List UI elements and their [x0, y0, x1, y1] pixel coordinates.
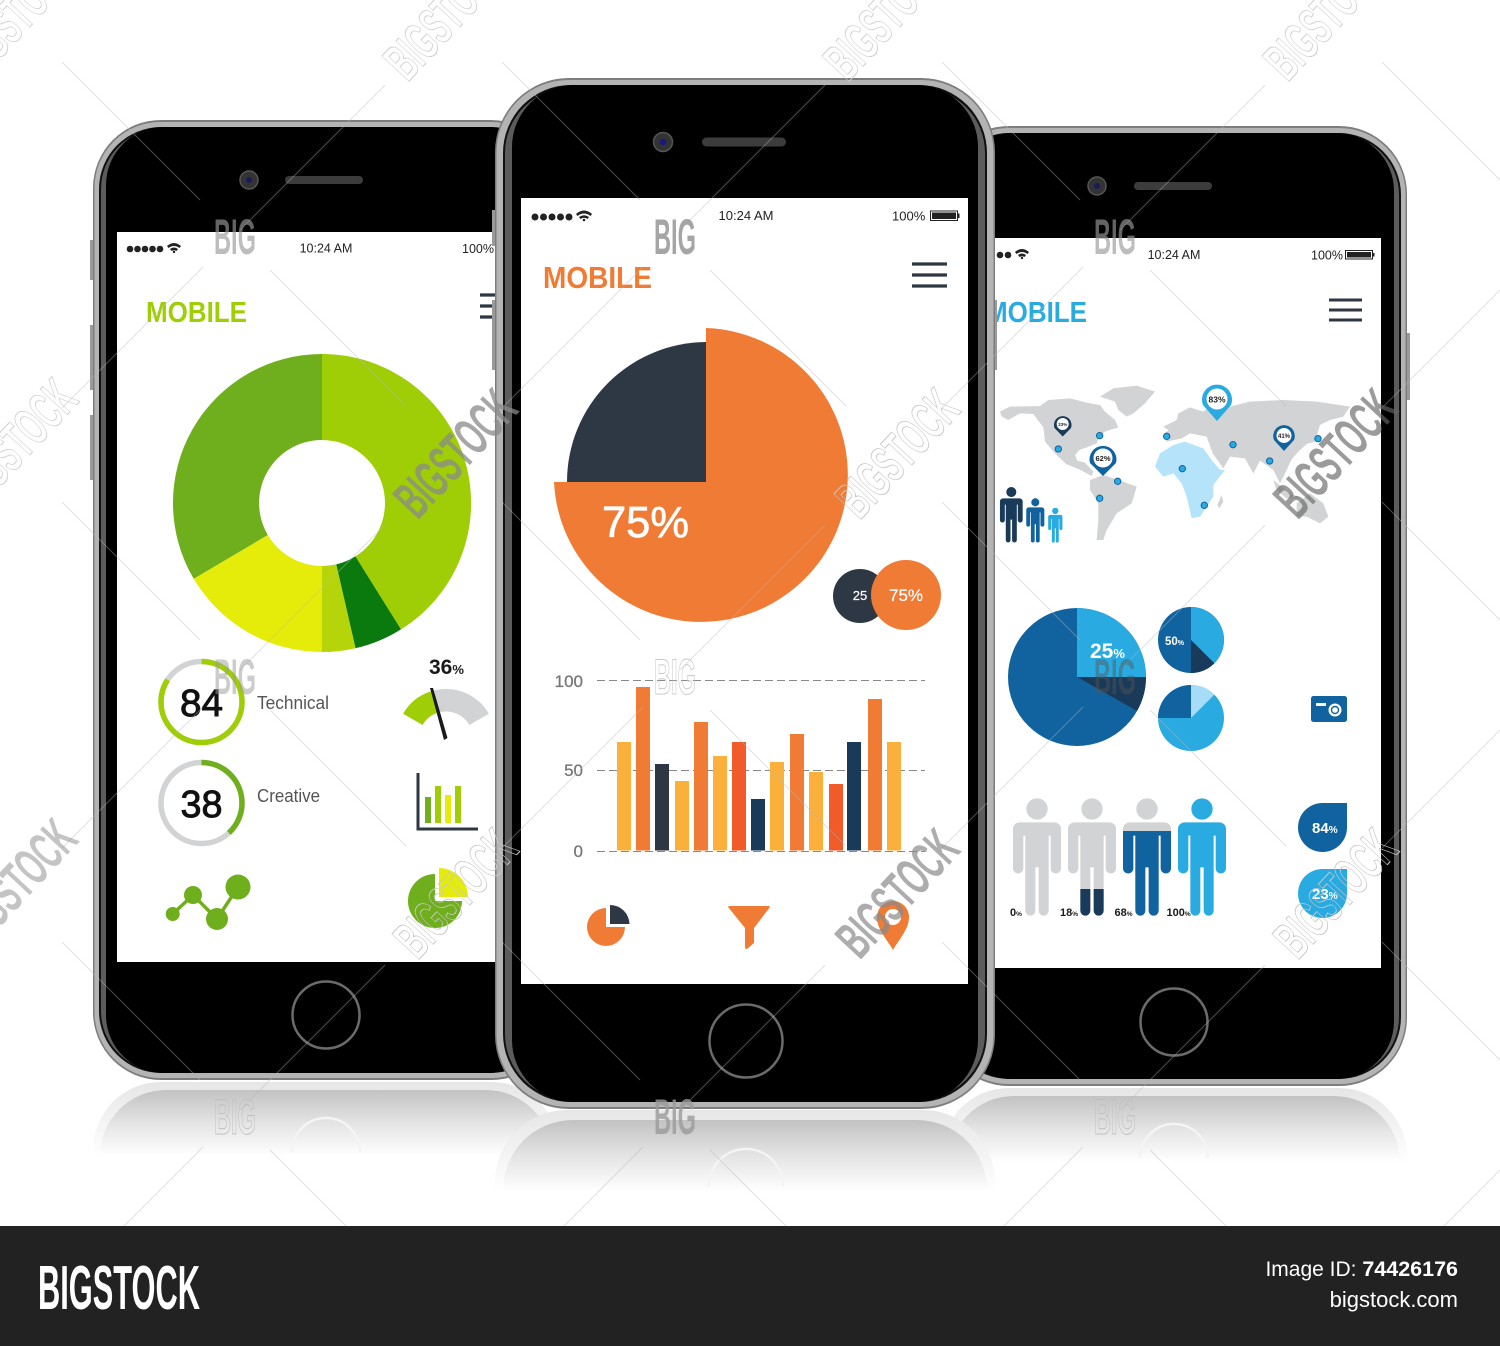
map pin 23 percent — [1054, 416, 1072, 436]
watermark: BIG labels: BIG — [214, 209, 256, 265]
watermark: BIGSTOCK diagonals: BIGSTOCK — [1263, 818, 1409, 969]
percentage labels: 0% — [1010, 907, 1022, 919]
bar chart — [555, 672, 925, 861]
camera — [654, 132, 672, 152]
drop: 23 percent: 23% — [1312, 886, 1338, 903]
ring: creative 38: Creative — [257, 786, 320, 806]
madagascar — [1217, 495, 1223, 508]
watermark: BIG labels: BIG — [654, 649, 696, 705]
heading: MOBILE — [543, 260, 652, 295]
map pin 62 percent — [1090, 446, 1116, 476]
ring: creative 38 — [161, 762, 320, 844]
pie: 50 percent — [1158, 607, 1224, 673]
screen — [965, 238, 1381, 968]
icon: bar chart — [418, 773, 478, 829]
status bar — [997, 248, 1374, 262]
percentage labels: 100% — [1166, 907, 1191, 919]
pie: 25 percent large: 25% — [1090, 640, 1125, 663]
comparison bubbles: 25 — [853, 588, 867, 603]
pie chart 75 percent — [554, 328, 848, 622]
small people: family — [1000, 487, 1062, 543]
phone: right, blue world map dashboard — [941, 126, 1410, 1086]
north america — [1000, 398, 1118, 476]
status bar — [532, 208, 960, 224]
text: BIG — [1094, 1089, 1136, 1145]
bars — [617, 687, 901, 850]
ring: creative 38: 38 — [180, 784, 222, 826]
reflection: right phone — [941, 1088, 1407, 1162]
map pin 23 percent: 23% — [1058, 422, 1067, 427]
status bar: 100% — [462, 242, 494, 256]
image id: Image ID: 74426176 — [1265, 1257, 1458, 1281]
home button — [1140, 988, 1208, 1056]
icon: pie — [408, 868, 468, 928]
footer bar: BIGSTOCK — [38, 1254, 200, 1323]
watermark: BIG labels — [214, 209, 1136, 1145]
person 100 percent — [1178, 798, 1226, 916]
status bar — [127, 242, 494, 256]
status bar: 100% — [892, 208, 926, 224]
watermark: BIGSTOCK diagonals: BIGSTOCK — [1263, 378, 1409, 529]
speaker — [1134, 182, 1212, 190]
status bar: 10:24 AM — [719, 208, 773, 223]
watermark: BIG labels: BIG — [214, 1089, 256, 1145]
side buttons — [492, 210, 997, 370]
menu icon — [480, 295, 515, 317]
phone body — [495, 78, 995, 1109]
indonesia — [1273, 480, 1303, 498]
pie: 25 percent large — [1008, 608, 1146, 746]
map pin 83 percent: 83% — [1208, 394, 1226, 404]
percentage labels — [1010, 907, 1191, 919]
axis labels: 0 — [574, 842, 583, 861]
menu icon — [1329, 300, 1362, 320]
watermark: BIG labels: BIG — [654, 1089, 696, 1145]
gauge 36 percent — [403, 656, 489, 740]
reflection: middle phone — [495, 1110, 995, 1192]
heading: MOBILE — [986, 297, 1087, 329]
screen — [521, 198, 968, 984]
person 68 percent — [1123, 798, 1171, 916]
drop: 84 percent — [1298, 803, 1347, 852]
phone body — [93, 120, 559, 1080]
ring: technical 84 — [161, 662, 329, 742]
menu icon — [912, 264, 947, 286]
site url: bigstock.com — [1330, 1287, 1458, 1312]
side button — [1406, 333, 1410, 400]
map pin 83 percent — [1202, 385, 1232, 421]
people percentage row — [1010, 798, 1226, 919]
text: BIG — [1094, 649, 1136, 705]
watermark: BIGSTOCK diagonals: BIGSTOCK — [383, 818, 529, 969]
speaker — [702, 138, 786, 146]
australia — [1297, 493, 1328, 523]
home button — [710, 1004, 782, 1078]
ring: technical 84: 84 — [180, 683, 223, 725]
donut chart — [173, 354, 471, 652]
phone body — [941, 126, 1407, 1086]
icon: line nodes — [166, 874, 250, 930]
watermark: BIG labels: BIG — [654, 209, 696, 265]
watermark: BIGSTOCK diagonals: BIGSTOCK — [825, 378, 971, 529]
icon: pie — [587, 905, 630, 946]
drop: 84 percent: 84% — [1312, 820, 1338, 837]
map pin 41 percent — [1273, 425, 1295, 451]
footer bar — [0, 1226, 1500, 1346]
watermark: BIGSTOCK diagonals: BIGSTOCK — [383, 378, 529, 529]
pie: 50 percent: 50% — [1165, 636, 1185, 648]
home button — [292, 982, 360, 1048]
icon: funnel — [728, 906, 770, 949]
africa — [1155, 442, 1225, 518]
south america — [1090, 475, 1137, 540]
watermark: BIGSTOCK diagonals — [0, 0, 1409, 969]
pie chart 75 percent: 75% — [602, 498, 689, 547]
map pin 41 percent: 41% — [1278, 434, 1291, 440]
heading: MOBILE — [146, 297, 247, 329]
axis labels: 100 — [555, 672, 583, 691]
icon: location pin — [877, 901, 909, 950]
phone: middle, orange pie dashboard — [492, 78, 997, 1109]
eurasia — [1163, 400, 1350, 483]
speaker — [285, 176, 363, 184]
camera — [1088, 177, 1106, 195]
drop: 23 percent — [1298, 869, 1347, 918]
world map — [1000, 386, 1350, 540]
text: BIG — [1094, 209, 1136, 265]
phone: left, green donut dashboard — [90, 120, 559, 1080]
person 0 percent — [1013, 798, 1061, 916]
axis labels: 50 — [564, 761, 583, 780]
status bar: 10:24 AM — [300, 242, 352, 256]
pie: second small — [1158, 685, 1224, 751]
watermark: BIG labels: BIG — [214, 649, 256, 705]
side buttons — [90, 240, 94, 480]
camera — [240, 171, 258, 189]
map dots — [1055, 432, 1321, 508]
comparison bubbles: 75% — [889, 586, 923, 605]
reflection: left phone — [93, 1082, 559, 1156]
comparison bubbles — [833, 560, 941, 630]
person 18 percent — [1068, 798, 1116, 916]
percentage labels: 68% — [1114, 907, 1133, 919]
axis labels — [555, 672, 583, 861]
status bar: 10:24 AM — [1148, 248, 1200, 262]
icon: camera — [1311, 696, 1347, 722]
gauge 36 percent: 36% — [429, 656, 464, 679]
percentage labels: 18% — [1060, 907, 1078, 919]
status bar: 100% — [1311, 248, 1343, 262]
greenland — [1100, 386, 1155, 417]
ring: technical 84: Technical — [257, 693, 329, 713]
screen — [117, 232, 537, 962]
watermark: BIGSTOCK diagonals: BIGSTOCK — [825, 818, 971, 969]
map pin 62 percent: 62% — [1095, 454, 1111, 463]
